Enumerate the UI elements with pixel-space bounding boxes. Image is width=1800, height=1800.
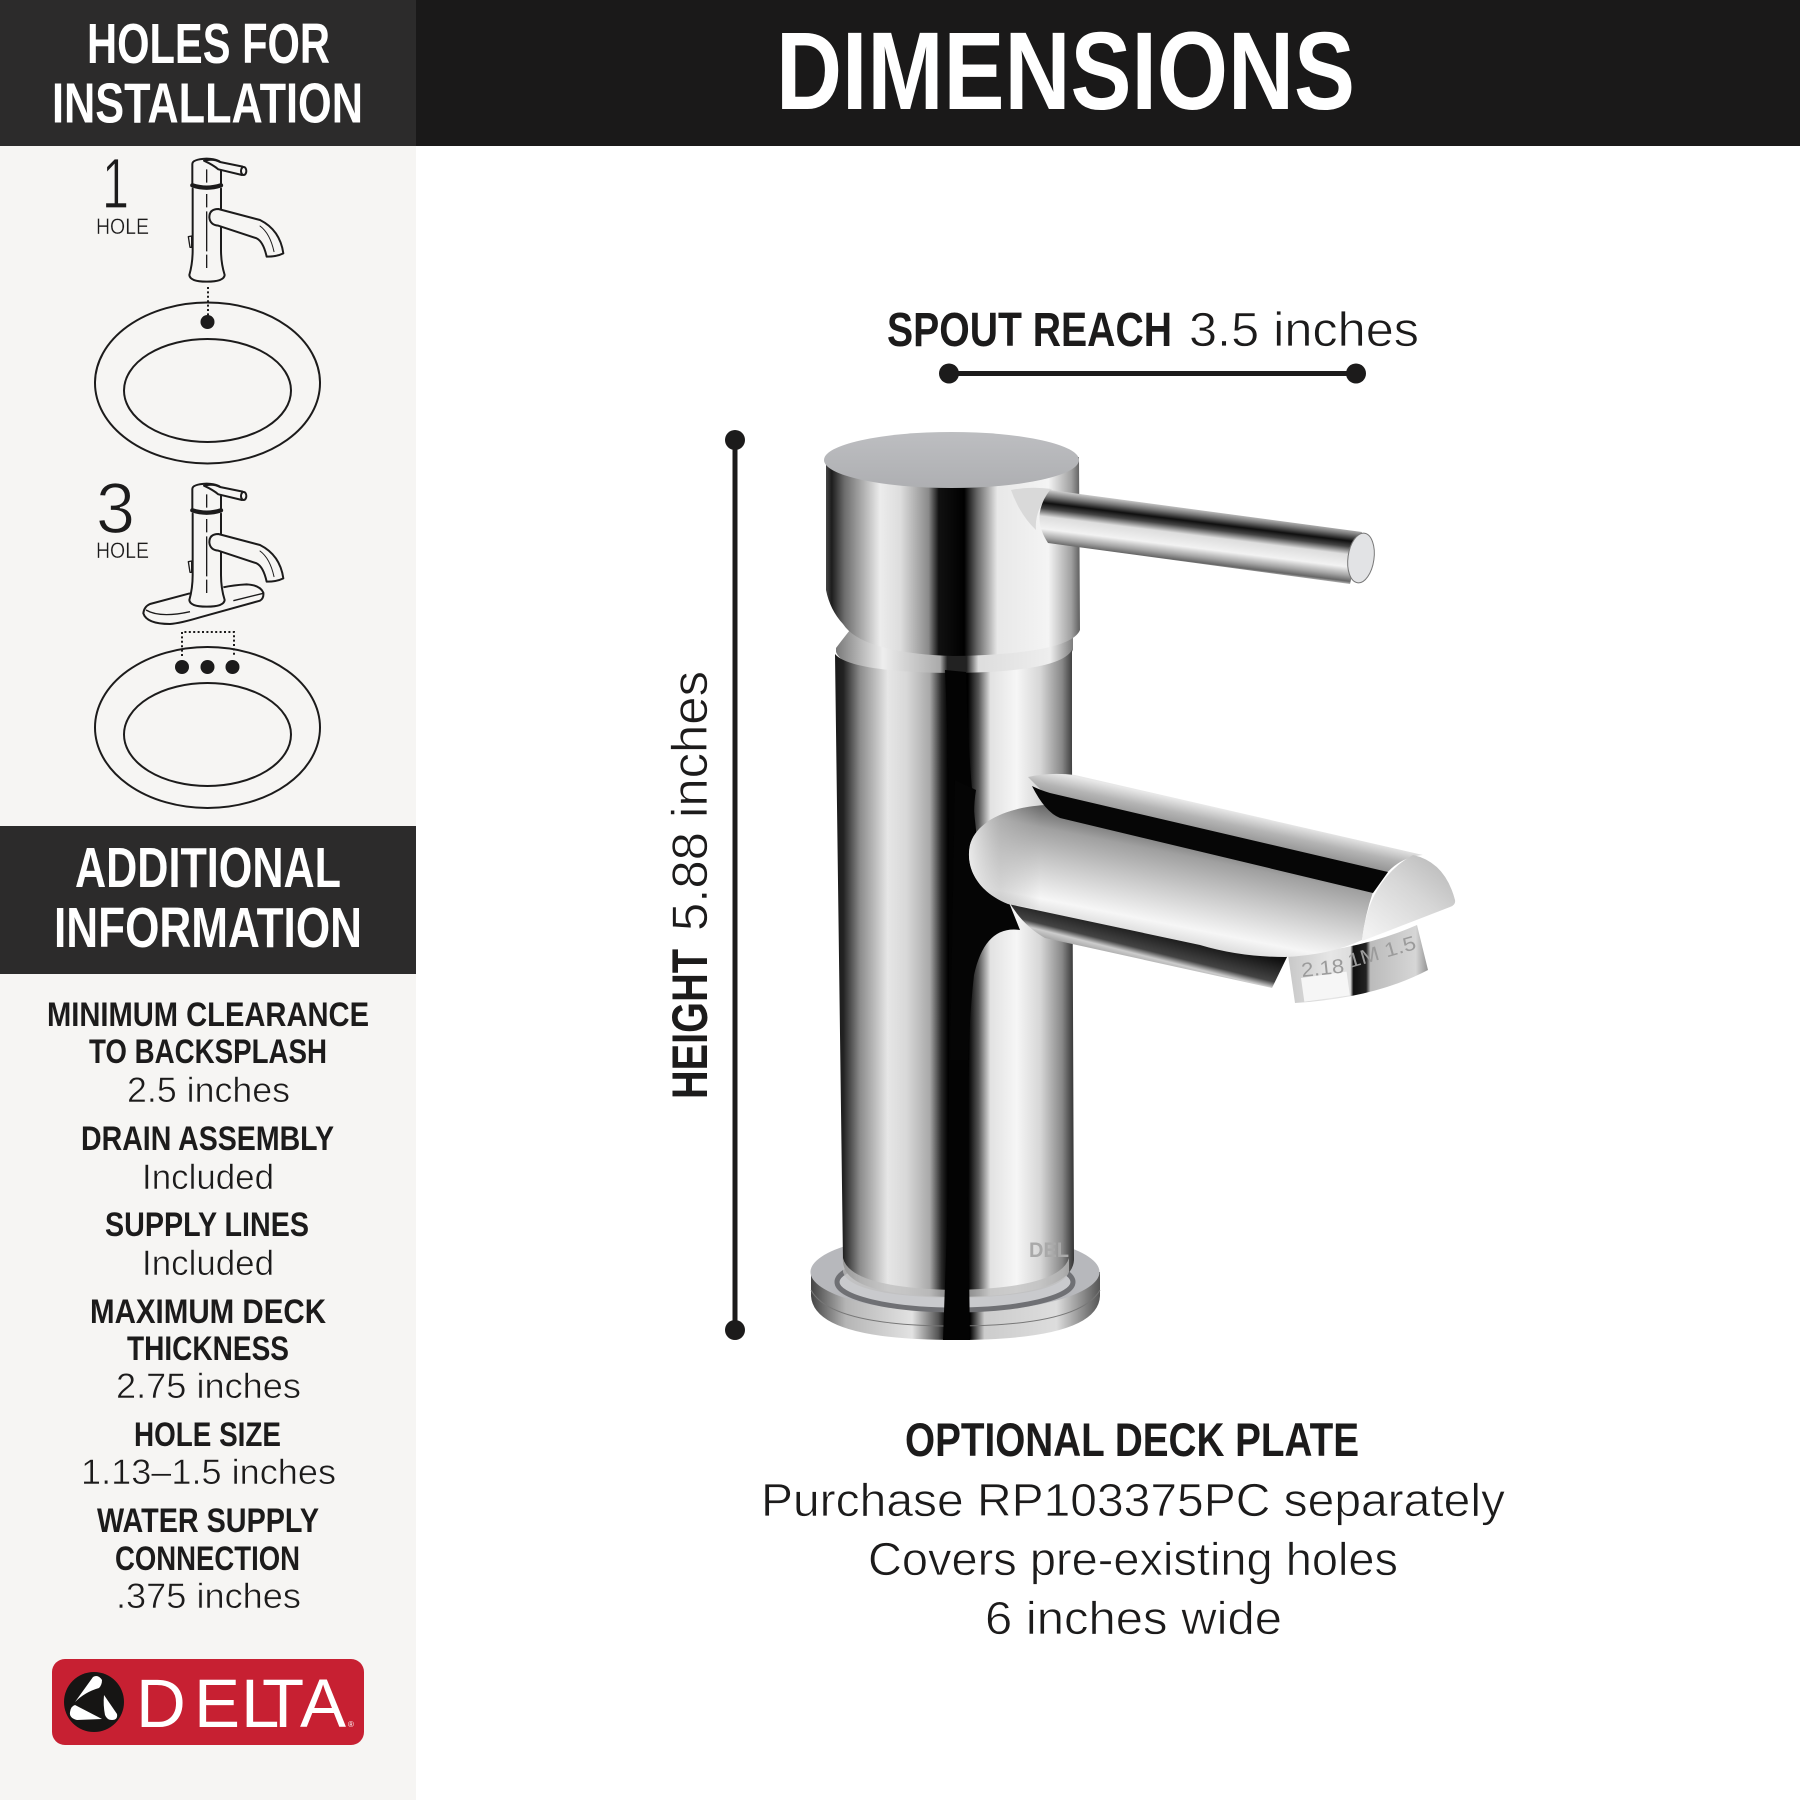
icon: three hole faucet with deck plate xyxy=(143,484,283,624)
spec: minimum clearance to backsplash: MINIMUM CLEARANCE xyxy=(47,996,369,1034)
note: optional deck plate: OPTIONAL DECK PLATE xyxy=(905,1413,1359,1466)
faucet body xyxy=(835,650,1074,1297)
spec: minimum clearance to backsplash: TO BACKSPLASH xyxy=(89,1033,327,1071)
head top surface xyxy=(824,432,1079,488)
spec: hole size xyxy=(81,1416,336,1492)
label: height: HEIGHT xyxy=(662,949,718,1099)
spec: hole size: 1.13–1.5 inches xyxy=(81,1453,336,1492)
spec: drain assembly: DRAIN ASSEMBLY xyxy=(81,1120,334,1158)
aerator xyxy=(1288,925,1428,1003)
underside of spout xyxy=(1008,900,1288,988)
handle lever xyxy=(1039,490,1377,585)
icon: single hole faucet xyxy=(188,159,283,282)
panel: left sidebar xyxy=(0,0,416,1800)
logo: delta: ® xyxy=(348,1720,354,1729)
label: spout reach: 3.5 inches xyxy=(1189,304,1419,357)
spec: maximum deck thickness: THICKNESS xyxy=(127,1330,289,1368)
icon: one hole sink xyxy=(95,287,320,464)
spec: maximum deck thickness: MAXIMUM DECK xyxy=(90,1293,326,1331)
note: optional deck plate: Purchase RP103375PC separately xyxy=(761,1474,1505,1526)
spec: water supply connection: .375 inches xyxy=(116,1577,301,1616)
heading: holes for installation xyxy=(0,0,416,146)
logo: delta xyxy=(52,1659,364,1745)
faucet photo xyxy=(810,432,1455,1340)
label: 1 hole xyxy=(96,145,149,239)
spout left highlight xyxy=(969,805,1045,910)
label: 1 hole: HOLE xyxy=(96,214,149,239)
spec: supply lines: Included xyxy=(142,1244,274,1283)
spout body xyxy=(969,805,1373,957)
base plate xyxy=(810,1232,1100,1340)
spec: maximum deck thickness xyxy=(90,1293,326,1406)
note: optional deck plate xyxy=(761,1413,1505,1644)
label: 1 hole: 1 xyxy=(102,145,129,224)
spout black reflection band xyxy=(1032,786,1388,893)
spout end face xyxy=(1362,855,1455,941)
heading: additional information: INFORMATION xyxy=(54,896,362,960)
aerator: 2.18 xyxy=(1300,956,1345,982)
logo: delta: DELTA xyxy=(136,1665,346,1742)
label: spout reach: SPOUT REACH xyxy=(887,304,1172,357)
heading: holes for installation: HOLES FOR xyxy=(87,12,330,76)
junction shadow xyxy=(950,780,1020,1060)
arrow: spout reach dimension line xyxy=(939,364,1366,384)
spec: drain assembly: Included xyxy=(142,1158,274,1197)
label: spout reach xyxy=(887,304,1419,357)
spec: water supply connection: WATER SUPPLY xyxy=(97,1502,319,1540)
icon: three hole sink xyxy=(95,632,320,808)
label: height: 5.88 inches xyxy=(662,671,718,931)
label: height xyxy=(662,671,718,1099)
label: 3 hole: 3 xyxy=(96,470,135,549)
spec: minimum clearance to backsplash xyxy=(47,996,369,1110)
spec: drain assembly xyxy=(81,1120,334,1197)
head cylinder xyxy=(826,457,1080,656)
engraved brand: DEL xyxy=(1029,1239,1069,1262)
handle lever root wedge xyxy=(1011,488,1052,530)
spec: hole size: HOLE SIZE xyxy=(134,1416,281,1454)
label: 3 hole xyxy=(96,470,149,563)
spec: water supply connection: CONNECTION xyxy=(115,1540,300,1578)
body lower shading xyxy=(843,1258,1069,1298)
spout top surface xyxy=(1028,774,1423,875)
spec: minimum clearance to backsplash: 2.5 inches xyxy=(127,1071,290,1110)
arrow: height dimension line xyxy=(725,430,745,1340)
header bar: dimensions xyxy=(416,0,1800,146)
aerator: 1M 1.5 xyxy=(1345,932,1419,973)
heading: holes for installation: INSTALLATION xyxy=(52,72,363,136)
note: optional deck plate: 6 inches wide xyxy=(985,1592,1282,1644)
spec: water supply connection xyxy=(97,1502,319,1616)
header bar: dimensions: DIMENSIONS xyxy=(776,10,1355,133)
spec: supply lines: SUPPLY LINES xyxy=(105,1206,309,1244)
collar ring xyxy=(836,630,1073,677)
spec: supply lines xyxy=(105,1206,309,1283)
note: optional deck plate: Covers pre-existing holes xyxy=(868,1533,1398,1585)
black stripe xyxy=(943,670,976,1340)
label: 3 hole: HOLE xyxy=(96,538,149,563)
heading: additional information xyxy=(0,826,416,974)
heading: additional information: ADDITIONAL xyxy=(75,836,341,900)
spec: maximum deck thickness: 2.75 inches xyxy=(116,1367,301,1406)
